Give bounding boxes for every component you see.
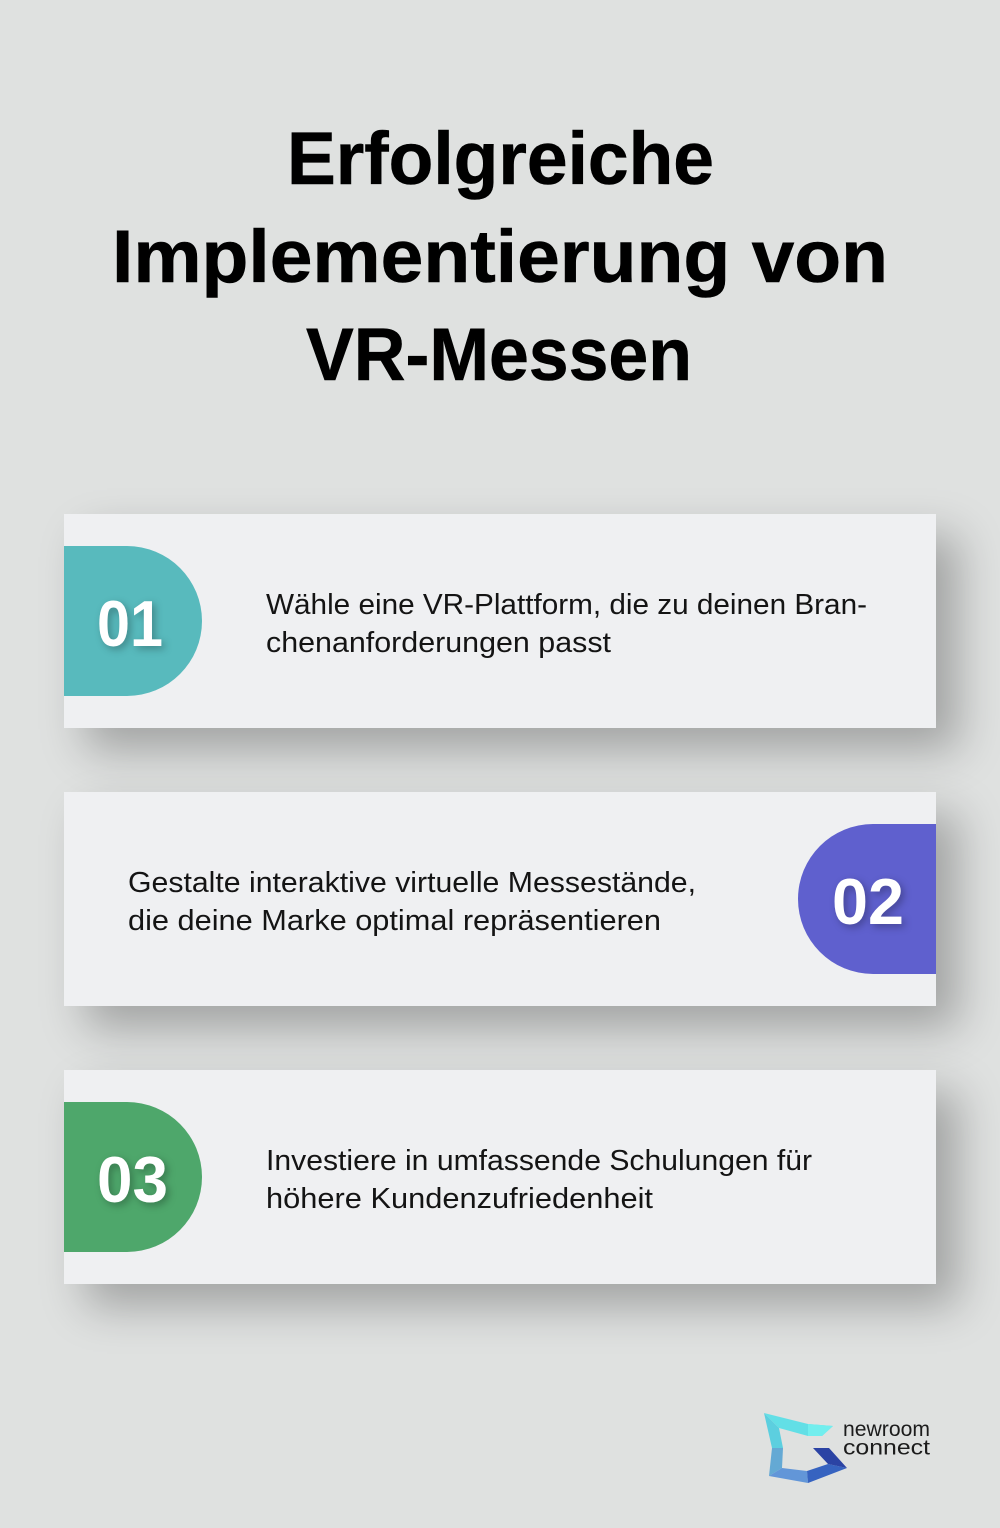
badge: 01 [64,546,202,696]
text: step 02: Gestalte interaktive virtuelle Messestände, [128,867,696,899]
title: Erfolgreiche [287,117,714,200]
logo: newroom connect [764,1413,930,1483]
title: Implementierung von [112,215,888,298]
badge: 03 [64,1102,202,1252]
number 02: 02 [832,865,904,938]
panel: step 03 [64,1070,936,1284]
text: step 01: chenanforderungen passt [266,627,611,659]
text: step 01 [266,589,867,659]
text: step 03 [266,1145,813,1215]
number 01: 01 [97,587,163,660]
text: step 03: Investiere in umfassende Schulungen für [266,1145,813,1177]
logo: newroom connect: newroom [843,1417,930,1441]
badge: 02 [798,824,936,974]
number 03: 03 [97,1143,168,1216]
text: step 03: höhere Kundenzufriedenheit [266,1183,653,1215]
panel: step 01 [64,514,936,728]
text: step 02: die deine Marke optimal repräsentieren [128,905,661,937]
panel: step 02 [64,792,936,1006]
text: step 02 [128,867,696,937]
title [112,117,888,396]
title: VR-Messen [306,313,692,396]
logo: newroom connect: connect [843,1436,930,1460]
text: step 01: Wähle eine VR-Plattform, die zu deinen Bran- [266,589,867,621]
